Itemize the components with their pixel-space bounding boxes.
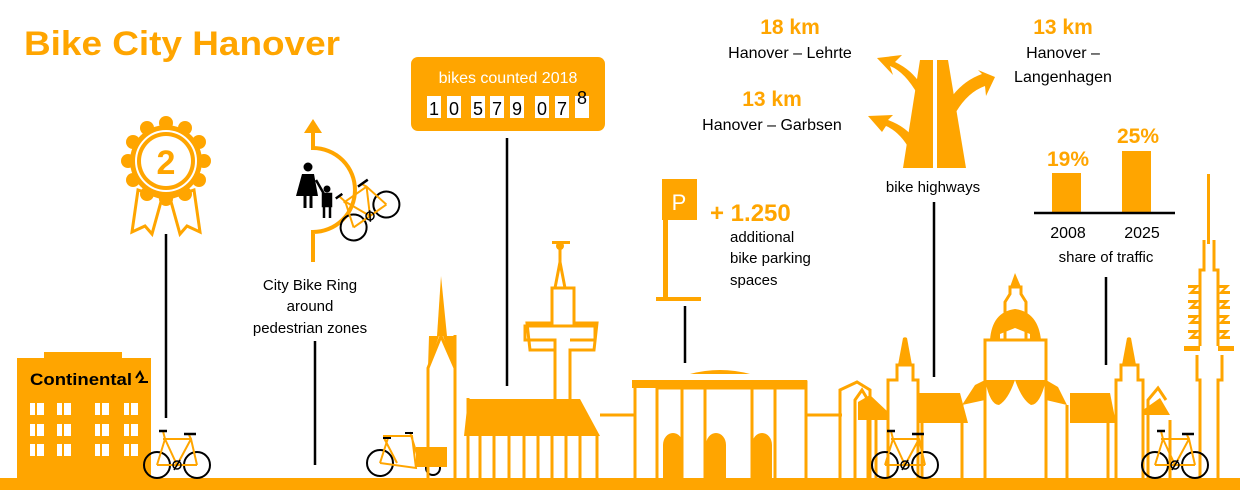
- chart: share of traffic: 25%: [1117, 125, 1159, 148]
- panel: bikes counted: 7: [492, 99, 502, 119]
- icon: parking sign: P: [672, 190, 686, 215]
- text: city bike ring: City Bike Ring: [263, 277, 357, 294]
- ground: [0, 478, 1240, 490]
- text: bike highway distances: 13 km: [742, 88, 802, 111]
- panel: bikes counted: 8: [577, 88, 587, 108]
- chart: share of traffic: 2025: [1124, 225, 1160, 242]
- text: parking: additional: [730, 229, 794, 246]
- chart: share of traffic: share of traffic: [1059, 249, 1154, 266]
- chart: share of traffic: [1034, 125, 1175, 266]
- panel: bikes counted: 9: [512, 99, 522, 119]
- panel: bikes counted: 1: [429, 99, 439, 119]
- panel: bikes counted: [411, 57, 605, 131]
- text: bike highway distances: 13 km: [1033, 16, 1093, 39]
- title: Bike City Hanover: [24, 25, 340, 63]
- icon: parking sign: [656, 179, 701, 301]
- bike 1: [144, 431, 210, 478]
- cargo bike: [367, 432, 447, 476]
- text: bike highway distances: Hanover –: [1026, 45, 1100, 62]
- panel: bikes counted: 0: [449, 99, 459, 119]
- text: bike highway distances: Langenhagen: [1014, 69, 1112, 86]
- text: bike highway distances: 18 km: [760, 16, 820, 39]
- icon: bike highways: [868, 55, 995, 168]
- chart: share of traffic: 2008: [1050, 225, 1086, 242]
- text: city bike ring: [253, 277, 367, 337]
- text: bike highway distances: Hanover – Garbsen: [702, 117, 842, 134]
- text: parking: + 1.250: [710, 200, 791, 227]
- text: parking: bike parking: [730, 250, 811, 267]
- panel: bikes counted: 5: [473, 99, 483, 119]
- panel: bikes counted: bikes counted 2018: [439, 70, 577, 87]
- chart: share of traffic: 19%: [1047, 148, 1089, 171]
- text: parking: [710, 200, 811, 289]
- building: Continental: Continental: [30, 370, 132, 389]
- connector line: award: [165, 234, 167, 418]
- text: city bike ring: around: [287, 298, 333, 315]
- skyline: town hall: [855, 287, 1170, 478]
- text: bike highways: [886, 179, 980, 196]
- skyline: old town: [428, 242, 870, 478]
- bike 2: [872, 431, 938, 478]
- bike 3: [1142, 431, 1208, 478]
- skyline: telecom tower: [1184, 174, 1234, 478]
- icon: city bike ring: [296, 119, 404, 262]
- text: bike highway distances: [702, 16, 1112, 134]
- panel: bikes counted: 0: [537, 99, 547, 119]
- icon: award rosette: [121, 116, 211, 234]
- icon: award rosette: 2: [157, 144, 175, 182]
- panel: bikes counted: 7: [557, 99, 567, 119]
- building: Continental: [17, 352, 151, 478]
- text: bike highway distances: Hanover – Lehrte: [728, 45, 852, 62]
- text: city bike ring: pedestrian zones: [253, 320, 367, 337]
- text: parking: spaces: [730, 272, 778, 289]
